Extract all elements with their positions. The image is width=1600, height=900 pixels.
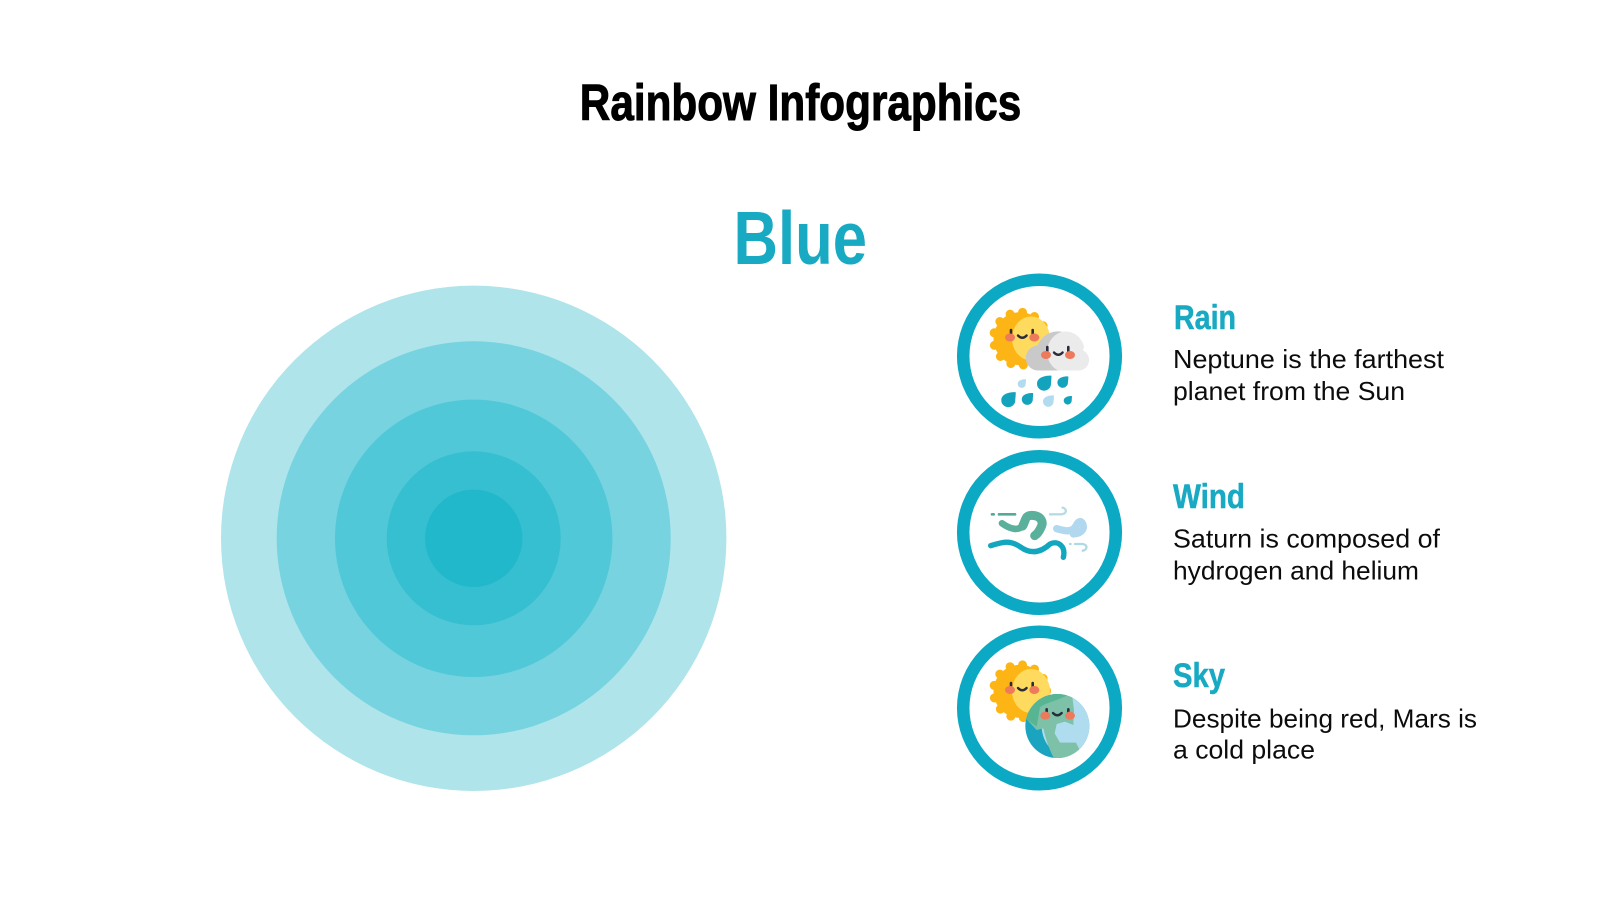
icon: wind — [991, 508, 1086, 557]
text block: Sky — [1173, 657, 1477, 764]
ring: rain — [963, 280, 1116, 432]
text block: Wind: Wind — [1173, 478, 1245, 516]
text block: Rain — [1173, 299, 1445, 406]
title: Rainbow Infographics — [580, 74, 1021, 131]
icon: sun and earth — [990, 660, 1090, 758]
text block: Rain: planet from the Sun — [1173, 376, 1405, 406]
concentric circles chart — [221, 286, 726, 791]
ring: sky — [963, 632, 1116, 784]
text block: Sky: Despite being red, Mars is — [1173, 703, 1477, 733]
text block: Rain: Rain — [1174, 299, 1236, 337]
text block: Wind — [1173, 478, 1441, 585]
text block: Sky: Sky — [1173, 657, 1225, 695]
text block: Wind: hydrogen and helium — [1173, 555, 1419, 585]
text block: Wind: Saturn is composed of — [1173, 523, 1441, 553]
heading: Blue: Blue — [734, 196, 867, 280]
ring: wind — [963, 456, 1116, 609]
text block: Sky: a cold place — [1173, 734, 1315, 764]
icon: sun and rain cloud — [994, 312, 1089, 407]
text block: Rain: Neptune is the farthest — [1173, 344, 1445, 374]
